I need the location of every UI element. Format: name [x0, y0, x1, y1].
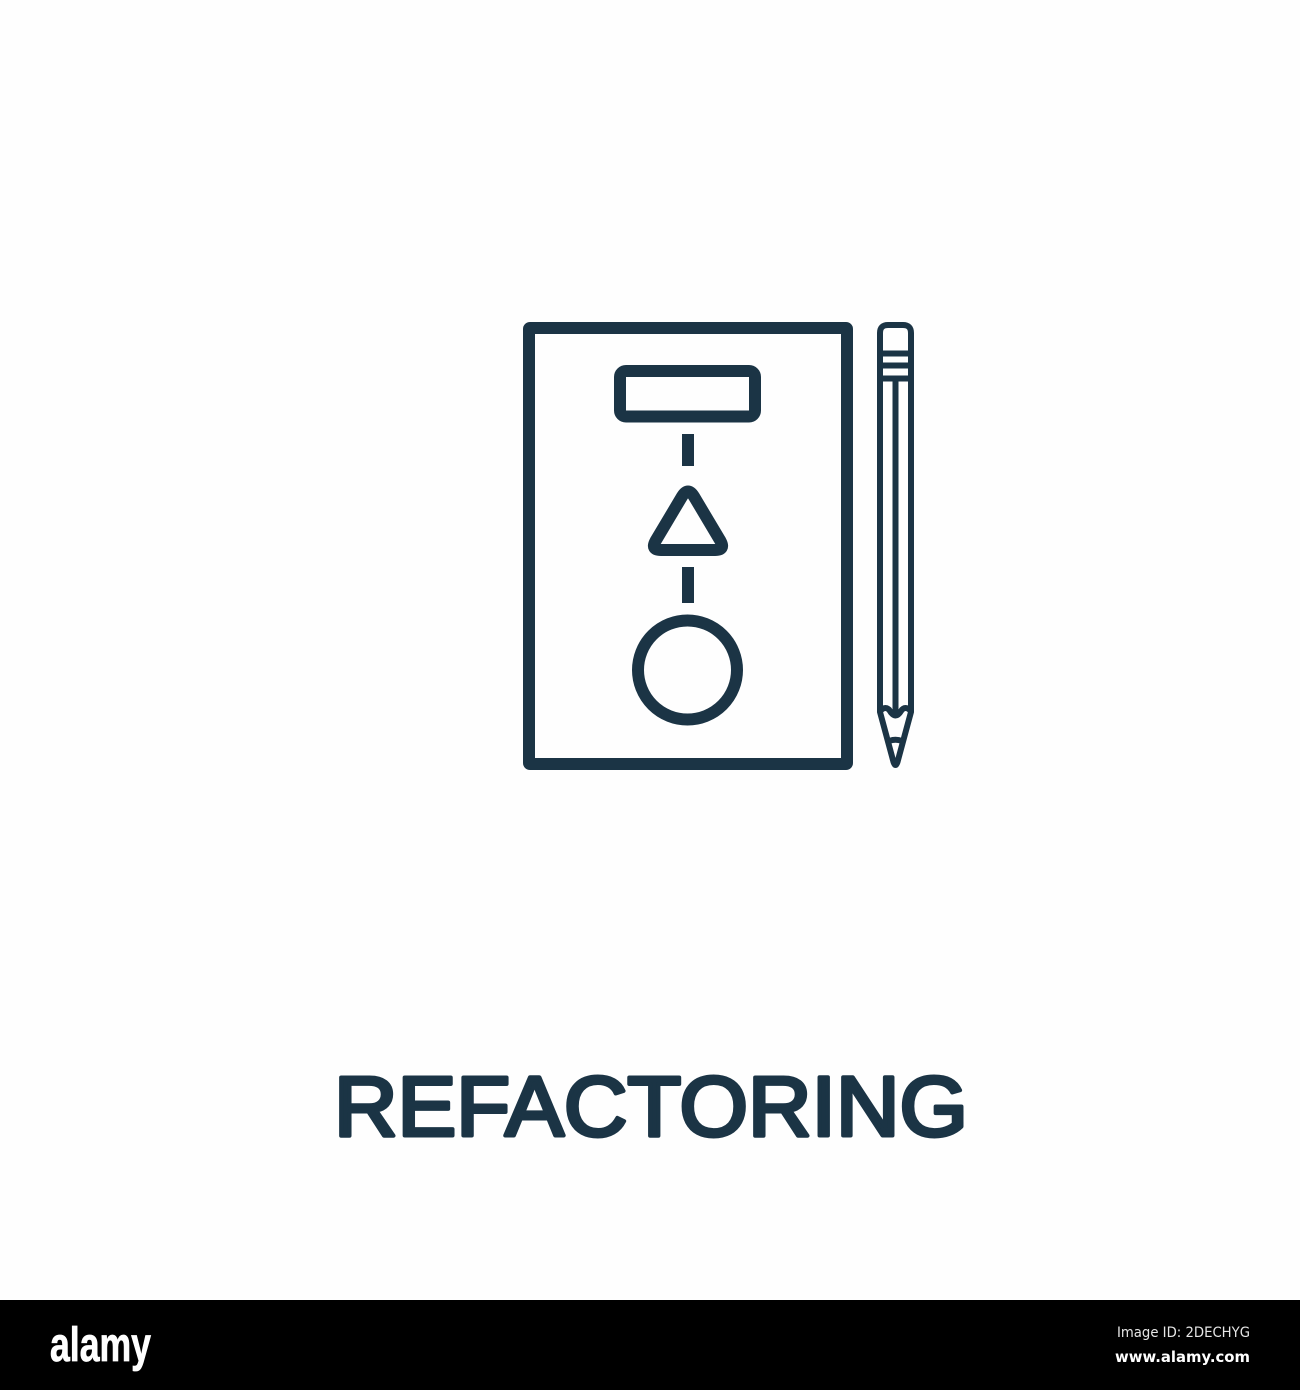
icon: flowchart triangle [654, 492, 722, 550]
footer logo: alamy [50, 1319, 151, 1372]
icon: refactoring flowchart on paper with pencil [529, 325, 911, 765]
connector: rectangle to triangle [682, 434, 694, 466]
icon: flowchart rectangle [620, 371, 755, 416]
footer image id: Image ID: 2DECHYG [1117, 1325, 1250, 1341]
footer url: www.alamy.com [1115, 1348, 1250, 1366]
watermark footer bar [0, 1300, 1300, 1390]
icon: pencil [880, 325, 911, 765]
icon: paper sheet [529, 328, 847, 764]
title: REFACTORING [334, 1060, 968, 1154]
icon: flowchart circle [638, 620, 737, 720]
connector: triangle to circle [682, 567, 694, 603]
